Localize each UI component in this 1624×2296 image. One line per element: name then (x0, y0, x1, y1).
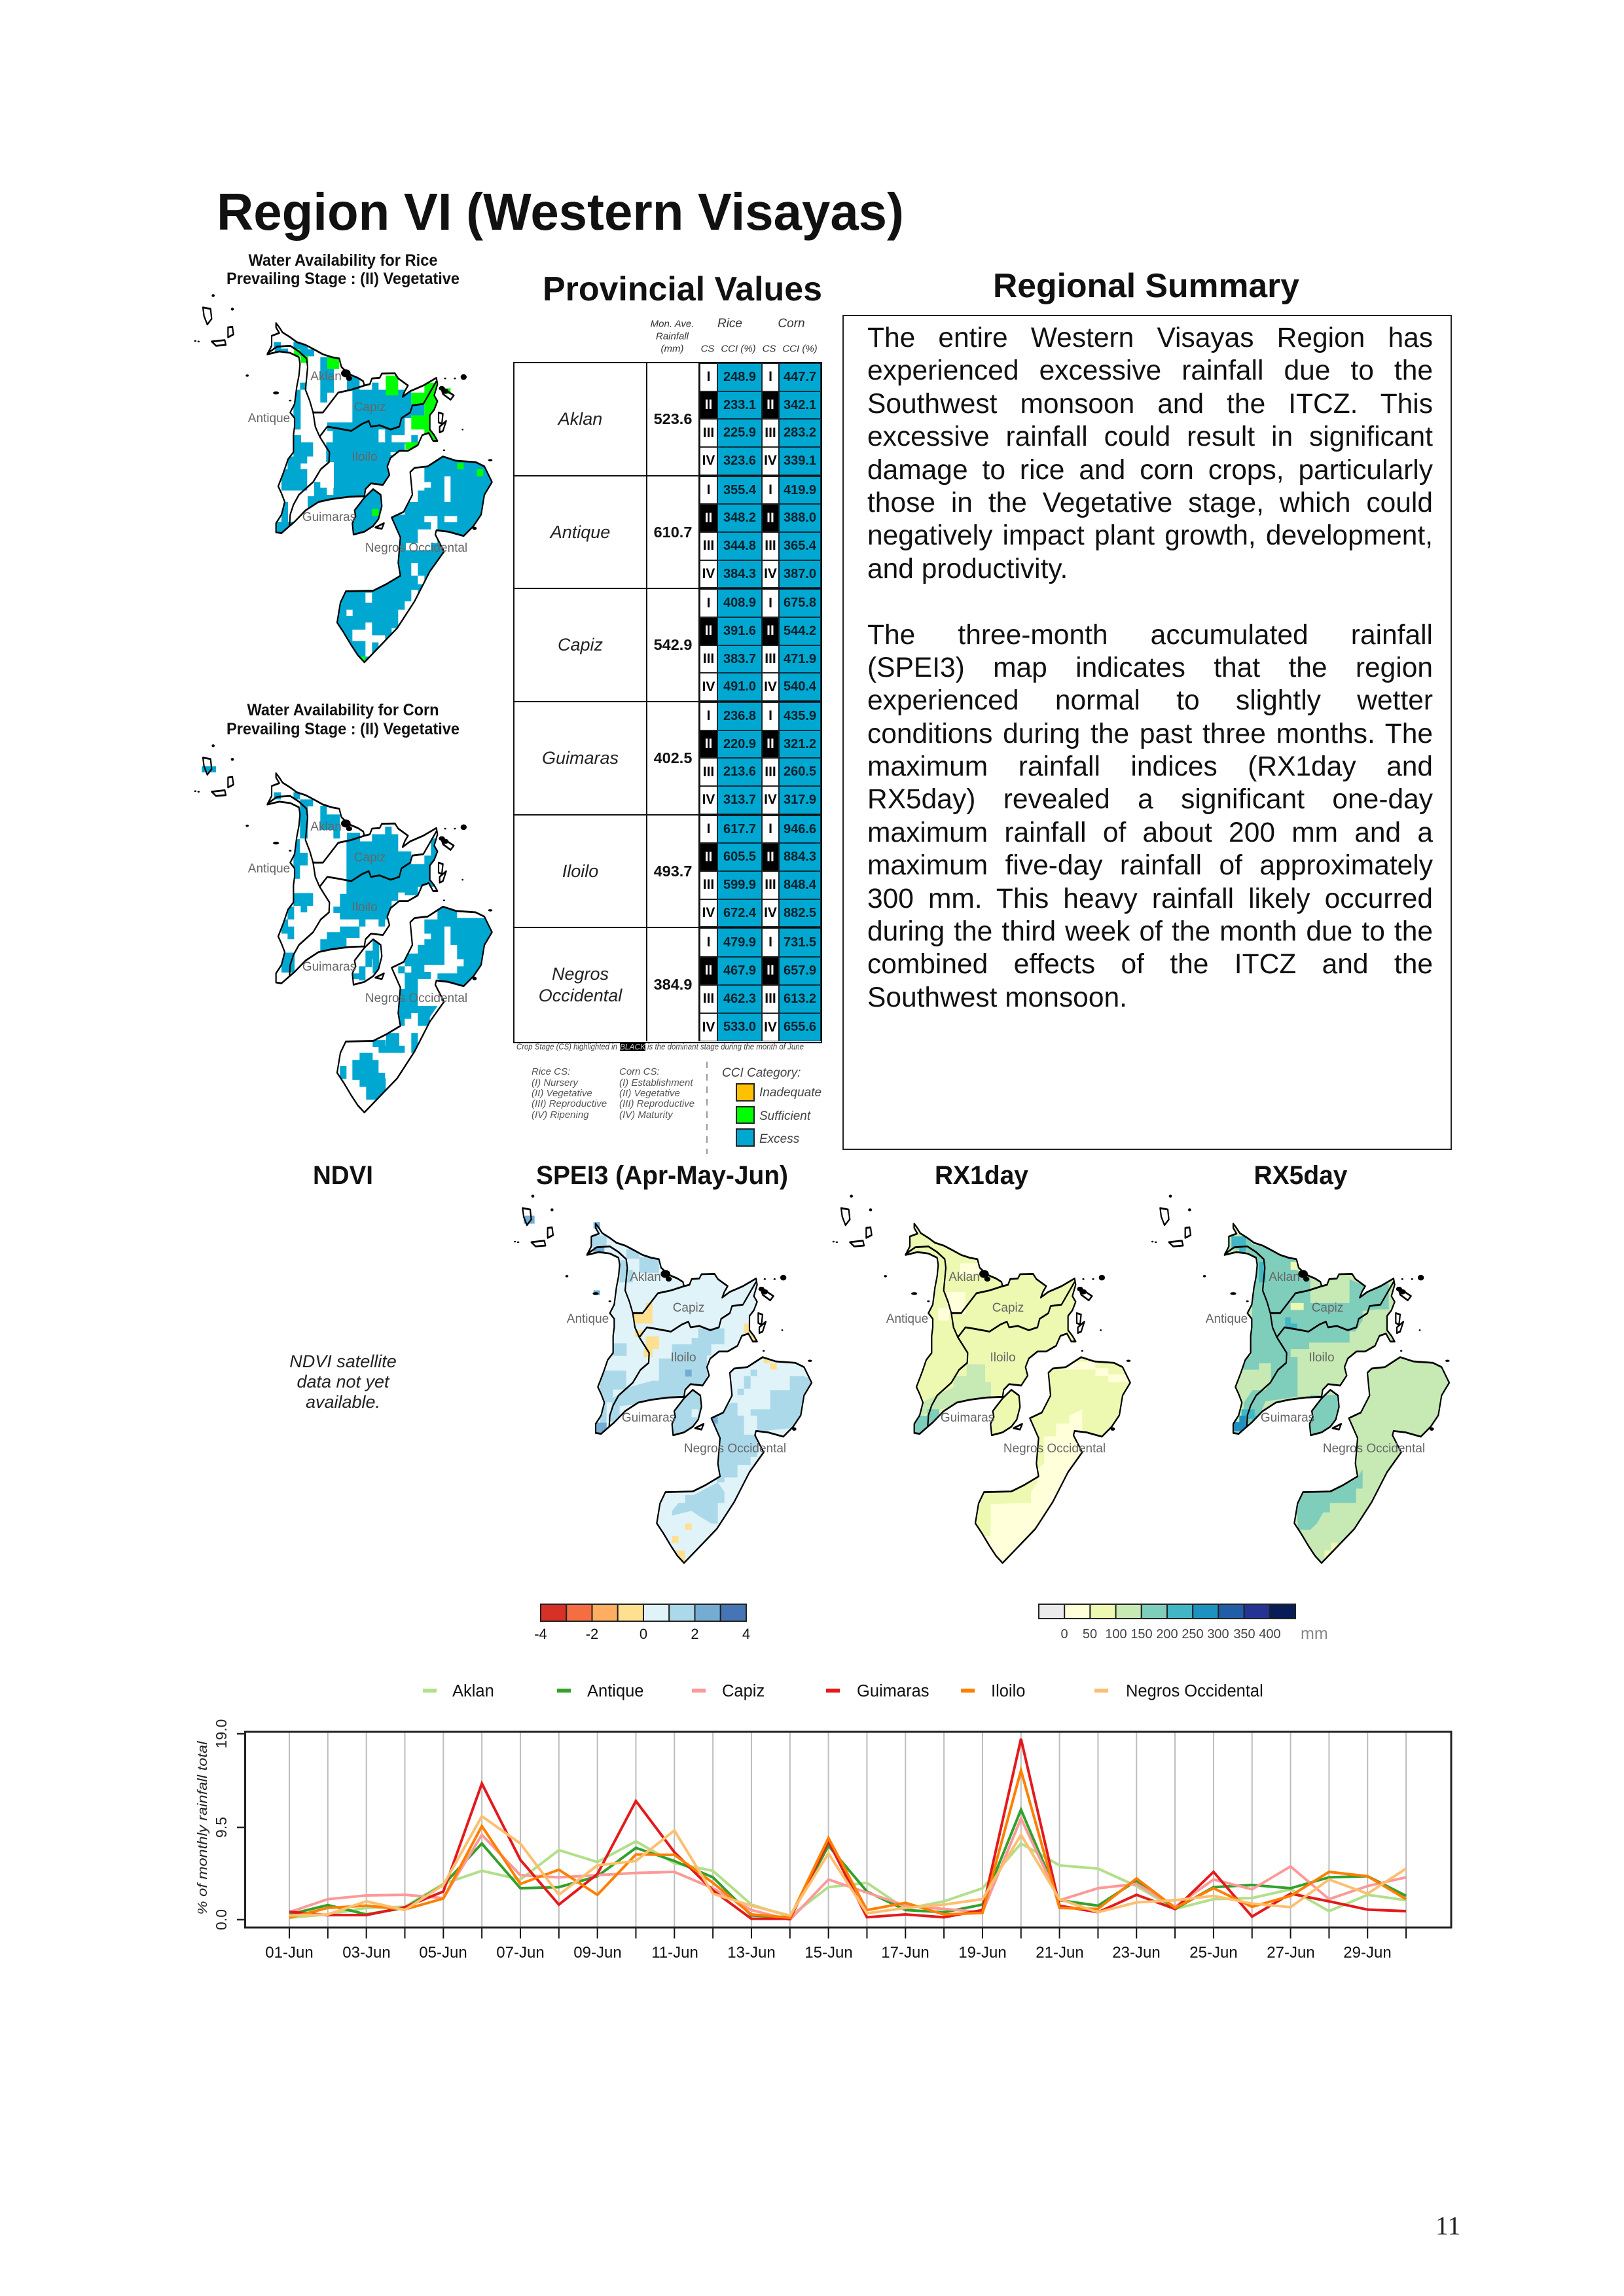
table row: Guimaras: 317.9 (784, 793, 816, 807)
table column headers (651, 317, 818, 355)
table row: Guimaras: II (767, 736, 774, 751)
table row: Iloilo: 848.4 (784, 878, 816, 892)
x axis labels: 19-Jun (958, 1944, 1007, 1962)
panel: corn water availability map (194, 701, 493, 1113)
series: Iloilo (289, 1770, 1406, 1918)
table row: Negros Occidental: 613.2 (784, 992, 816, 1006)
legend: rainfall colour bar: 0 (1060, 1627, 1068, 1641)
heading: NDVI: NDVI (313, 1161, 373, 1190)
table row: Guimaras: Guimaras (542, 748, 619, 768)
table row: Capiz: IV (764, 679, 777, 694)
table row: Capiz: 542.9 (654, 636, 692, 653)
map labels: rice: Antique (248, 412, 290, 425)
table row: Guimaras: 260.5 (784, 764, 816, 779)
table column headers: (mm) (661, 343, 683, 355)
panel: RX1day map (833, 1161, 1130, 1565)
table row: Antique: 365.4 (784, 539, 816, 553)
map labels: RX5day: Guimaras (1261, 1411, 1314, 1425)
panel: RX5day map (1151, 1161, 1450, 1563)
table row: Negros Occidental: 657.9 (784, 963, 816, 978)
table row: Guimaras: IV (764, 792, 777, 807)
NDVI unavailable note (289, 1352, 397, 1412)
table row: Antique: 355.4 (723, 483, 756, 497)
legend: corn crop stages: (II) Vegetative (619, 1088, 680, 1099)
chart legend: Antique (587, 1682, 644, 1700)
NDVI unavailable note: NDVI satellite (289, 1352, 397, 1371)
map labels: SPEI3 (567, 1270, 786, 1456)
map labels: RX5day: Capiz (1312, 1301, 1343, 1315)
y axis labels: 0.0 (213, 1909, 230, 1930)
map labels: RX1day: Negros Occidental (1003, 1442, 1106, 1456)
heading: rice map title (226, 251, 460, 288)
legend: SPEI colour bar: -4 (534, 1626, 547, 1642)
legend: rice crop stages (532, 1066, 607, 1121)
table row: Negros Occidental: IV (764, 1020, 777, 1035)
table row: Aklan: 225.9 (723, 425, 756, 440)
table row: Antique: 344.8 (723, 539, 756, 553)
legend: corn crop stages: (I) Establishment (619, 1077, 693, 1088)
table row: Antique: IV (702, 566, 715, 581)
map labels: corn: Negros Occidental (365, 992, 467, 1005)
map labels: RX1day: Aklan (948, 1270, 980, 1284)
table row: Iloilo: 884.3 (784, 850, 816, 864)
x axis labels: 21-Jun (1036, 1944, 1084, 1962)
x axis labels: 07-Jun (496, 1944, 545, 1962)
table row: Antique: III (703, 538, 714, 553)
table row: Negros Occidental: 467.9 (723, 963, 756, 978)
table column headers: CS (701, 343, 714, 355)
panel: rice water availability map (194, 251, 493, 665)
table row: Iloilo: II (705, 850, 712, 865)
map labels: corn (248, 820, 467, 1005)
table row: Negros Occidental: 533.0 (723, 1020, 756, 1034)
map labels: RX1day (886, 1270, 1106, 1456)
chart legend: Negros Occidental (1126, 1682, 1263, 1700)
map labels: rice (248, 370, 467, 555)
NDVI unavailable note: data not yet (297, 1372, 390, 1391)
map labels: SPEI3: Iloilo (670, 1351, 696, 1365)
legend: rice crop stages: (I) Nursery (532, 1077, 579, 1088)
table row: Iloilo: IV (702, 905, 715, 920)
table row: Negros Occidental: Occidental (539, 986, 622, 1005)
text block: regional summary: experienced excessive rainfall due to the (867, 355, 1433, 386)
panel: SPEI3 map (514, 1161, 816, 1642)
table row: Capiz: IV (702, 679, 715, 694)
text block: regional summary: experienced normal to slightly wetter (867, 685, 1433, 716)
legend: CCI category (722, 1066, 821, 1146)
table row: Aklan: 523.6 (654, 410, 692, 427)
map labels: corn: Aklan (310, 820, 342, 834)
table row: Capiz: II (705, 623, 712, 638)
table row: Iloilo: 599.9 (723, 878, 756, 892)
legend: rainfall colour bar: 100 (1105, 1627, 1127, 1641)
text block: regional summary: those in the Vegetative stage, which could (867, 488, 1433, 518)
table row: Iloilo: 617.7 (723, 822, 756, 836)
text block: regional summary (867, 323, 1433, 1013)
x axis labels: 15-Jun (804, 1944, 853, 1962)
table row: Capiz: 491.0 (723, 679, 756, 694)
legend: corn crop stages: (IV) Maturity (619, 1109, 674, 1121)
legend: rice crop stages: (II) Vegetative (532, 1088, 592, 1099)
table row: Capiz: I (707, 596, 710, 611)
table row: Capiz: III (765, 651, 776, 666)
x axis labels: 01-Jun (265, 1944, 314, 1962)
text block: regional summary: The entire Western Visayas Region has (867, 323, 1433, 353)
text block: regional summary: 300 mm. This heavy rainfall likely occurred (867, 884, 1433, 914)
legend: SPEI colour bar: -2 (586, 1626, 598, 1642)
table row: Guimaras: 435.9 (784, 709, 816, 723)
table row: Aklan: 283.2 (784, 425, 816, 440)
map labels: RX5day: Aklan (1269, 1270, 1300, 1284)
x axis labels: 03-Jun (342, 1944, 391, 1962)
table row: Capiz: 471.9 (784, 652, 816, 666)
legend: rainfall colour bar: 250 (1182, 1627, 1204, 1641)
legend: rainfall colour bar: 50 (1083, 1627, 1097, 1641)
map labels: RX1day: Antique (886, 1312, 928, 1326)
x axis labels: 13-Jun (727, 1944, 776, 1962)
map: SPEI3 (514, 1194, 816, 1563)
table row: Negros Occidental: 384.9 (654, 976, 692, 993)
legend: SPEI colour bar: 2 (691, 1626, 699, 1642)
legend: rainfall colour bar: 150 (1130, 1627, 1153, 1641)
table column headers: Corn (778, 317, 805, 331)
chart frame (245, 1732, 1451, 1928)
table row: Negros Occidental: IV (702, 1020, 715, 1035)
table row: Iloilo: 946.6 (784, 822, 816, 836)
table column headers: Rice (717, 317, 742, 331)
table row: Antique: 384.3 (723, 567, 756, 581)
chart legend: Capiz (722, 1682, 765, 1700)
map labels: SPEI3: Aklan (630, 1270, 661, 1284)
table row: Iloilo (514, 816, 821, 928)
series: Capiz (289, 1818, 1406, 1920)
table row: Capiz: 540.4 (784, 679, 816, 694)
table row: Aklan: 447.7 (784, 370, 816, 384)
legend: CCI category: Inadequate (759, 1086, 821, 1100)
map labels: corn: Antique (248, 862, 290, 876)
text block: regional summary: during the third week of the month due to the (867, 916, 1433, 947)
legend: rainfall colour bar (1039, 1604, 1328, 1643)
table row: Guimaras (514, 702, 821, 816)
chart legend: Guimaras (857, 1682, 929, 1700)
map labels: rice: Capiz (354, 401, 386, 414)
table row: Capiz: 408.9 (723, 596, 756, 610)
line chart: daily rainfall share (196, 1719, 1451, 1962)
table row: Antique: II (705, 511, 712, 526)
heading: rice map title: Water Availability for Rice (249, 251, 438, 270)
map labels: rice: Aklan (310, 370, 342, 384)
table row: Guimaras: IV (702, 792, 715, 807)
table row: Negros Occidental: 731.5 (784, 935, 816, 950)
table row: Antique: 388.0 (784, 511, 816, 525)
heading: corn map title: Water Availability for Corn (247, 701, 439, 719)
map labels: RX5day (1206, 1270, 1425, 1456)
table row: Antique: 348.2 (723, 511, 756, 525)
table row: Antique: 610.7 (654, 524, 692, 541)
map labels: SPEI3: Negros Occidental (684, 1442, 786, 1456)
table row: Capiz: 675.8 (784, 596, 816, 610)
table row: Aklan: I (707, 369, 710, 384)
map labels: SPEI3: Antique (567, 1312, 609, 1326)
map labels: RX1day: Capiz (992, 1301, 1024, 1315)
table row: Capiz: III (703, 651, 714, 666)
table row: Negros Occidental (539, 928, 821, 1041)
table row: Iloilo: I (707, 821, 710, 836)
legend: SPEI colour bar: 4 (742, 1626, 750, 1642)
table row: Antique: I (768, 482, 772, 497)
table row: Negros Occidental: 479.9 (723, 935, 756, 950)
x axis labels: 09-Jun (573, 1944, 622, 1962)
legend: rice crop stages: (IV) Ripening (532, 1109, 589, 1121)
table row: Antique: 419.9 (784, 483, 816, 497)
legend: rainfall colour bar: 300 (1207, 1627, 1229, 1641)
legend: SPEI colour bar: 0 (640, 1626, 647, 1642)
table row: Iloilo: Iloilo (562, 861, 598, 881)
x axis labels: 11-Jun (651, 1944, 698, 1962)
table row: Aklan: Aklan (558, 409, 602, 429)
map: RX1day (833, 1194, 1130, 1565)
map labels: SPEI3: Guimaras (622, 1411, 676, 1425)
map labels: RX5day: Negros Occidental (1323, 1442, 1425, 1456)
text block: regional summary: damage to rice and corn crops, particularly (867, 455, 1433, 486)
table row: Capiz: II (767, 623, 774, 638)
text block: regional summary: maximum rainfall indices (RX1day and (867, 751, 1433, 782)
x axis labels: 17-Jun (881, 1944, 929, 1962)
table row: Negros Occidental: III (703, 991, 714, 1006)
heading: SPEI3: SPEI3 (Apr-May-Jun) (536, 1161, 788, 1190)
x axis labels: 23-Jun (1112, 1944, 1161, 1962)
table row: Antique: IV (764, 566, 777, 581)
table row: Aklan: III (765, 425, 776, 440)
legend: CCI category: Sufficient (759, 1109, 811, 1123)
table row: Iloilo: 605.5 (723, 850, 756, 864)
table row: Iloilo: IV (764, 905, 777, 920)
table row: Aklan: 323.6 (723, 454, 756, 468)
table row: Iloilo: 493.7 (654, 863, 692, 880)
table row: Aklan: 233.1 (723, 398, 756, 412)
table: provincial values (513, 362, 822, 1043)
table row: Iloilo: 882.5 (784, 906, 816, 920)
table column headers: Mon. Ave. (651, 318, 694, 330)
text block: regional summary: combined effects of the ITCZ and the (867, 949, 1433, 980)
text block: regional summary: RX5day) revealed a significant one-day (867, 784, 1433, 815)
table row: Negros Occidental: Negros (552, 964, 609, 984)
table row: Negros Occidental: I (707, 935, 710, 950)
legend: rice crop stages: Rice CS: (532, 1066, 570, 1077)
table row: Aklan: II (767, 397, 774, 412)
panel: regional summary box (842, 315, 1452, 1150)
table row: Capiz: Capiz (558, 635, 603, 655)
map: RX5day (1151, 1194, 1450, 1563)
map labels: corn: Iloilo (352, 901, 378, 914)
title: Region VI (Western Visayas) (217, 183, 904, 241)
text block: regional summary: The three-month accumulated rainfall (867, 620, 1433, 651)
table row: Guimaras: 236.8 (723, 709, 756, 723)
heading: provincial values: Provincial Values (543, 270, 822, 308)
table column headers: Rainfall (656, 331, 689, 342)
text block: regional summary: Southwest monsoon and the ITCZ. This (867, 389, 1433, 420)
text block: regional summary: and productivity. (867, 554, 1068, 584)
table row: Capiz: 391.6 (723, 624, 756, 638)
map labels: RX1day: Guimaras (941, 1411, 994, 1425)
legend: CCI category: CCI Category: (722, 1066, 801, 1080)
table row: Guimaras: 313.7 (723, 793, 756, 807)
legend: SPEI colour bar (534, 1604, 750, 1642)
table row: Iloilo: III (703, 877, 714, 892)
legend: rainfall colour bar: 200 (1156, 1627, 1178, 1641)
map: corn water availability (194, 744, 493, 1113)
series: Guimaras (289, 1739, 1406, 1919)
table row: Aklan: II (705, 397, 712, 412)
legend: CCI category: Excess (759, 1132, 800, 1146)
text block: regional summary: maximum rainfall of about 200 mm and a (867, 817, 1433, 848)
table column headers: CCI (%) (782, 343, 818, 355)
map labels: RX1day: Iloilo (990, 1351, 1016, 1365)
table row: Guimaras: I (707, 708, 710, 723)
table row: Guimaras: 220.9 (723, 737, 756, 751)
table row: Negros Occidental: 655.6 (784, 1020, 816, 1034)
table row: Antique: Antique (550, 522, 610, 542)
y axis labels (213, 1719, 230, 1930)
table row: Iloilo: II (767, 850, 774, 865)
table row: Capiz: I (768, 596, 772, 611)
table row: Iloilo: III (765, 877, 776, 892)
table row: Capiz (514, 589, 821, 702)
table row: Guimaras: 402.5 (654, 749, 692, 766)
table footnote: Crop Stage (CS) highlighted in (516, 1042, 617, 1051)
table row: Guimaras: II (705, 736, 712, 751)
chart legend: Aklan (452, 1682, 494, 1700)
table row: Aklan: I (768, 369, 772, 384)
heading: rice map title: Prevailing Stage : (II) Vegetative (226, 270, 460, 288)
table row: Aklan (514, 363, 821, 476)
table row: Aklan: 248.9 (723, 370, 756, 384)
table row: Guimaras: III (703, 764, 714, 780)
map labels: rice: Iloilo (352, 450, 378, 464)
heading: corn map title: Prevailing Stage : (II) Vegetative (226, 720, 460, 738)
text block: regional summary: negatively impact plant growth, development, (867, 520, 1433, 551)
y axis title: % of monthly rainfall total (196, 1741, 210, 1915)
table footnote (516, 1042, 804, 1051)
table row: Iloilo: I (768, 821, 772, 836)
heading: corn map title (226, 701, 460, 738)
x axis labels: 27-Jun (1267, 1944, 1315, 1962)
legend: rice crop stages: (III) Reproductive (532, 1098, 607, 1109)
map labels: corn: Guimaras (302, 960, 356, 974)
table row: Guimaras: I (768, 708, 772, 723)
heading: RX1day: RX1day (935, 1161, 1029, 1190)
table row: Antique (514, 476, 821, 589)
map labels: RX5day: Iloilo (1308, 1351, 1335, 1365)
table row: Negros Occidental: II (767, 963, 774, 978)
table row: Aklan: IV (702, 453, 715, 468)
table row: Antique: 387.0 (784, 567, 816, 581)
table row: Guimaras: 321.2 (784, 737, 816, 751)
text block: regional summary: (SPEI3) map indicates that the region (867, 653, 1433, 683)
table row: Aklan: 342.1 (784, 398, 816, 412)
x axis labels (265, 1944, 1392, 1962)
series: Aklan (289, 1841, 1406, 1918)
page number: 11 (1435, 2211, 1461, 2240)
table row: Negros Occidental: 462.3 (723, 992, 756, 1006)
legend unit: mm (1301, 1624, 1328, 1643)
table row: Antique: I (707, 482, 710, 497)
map: rice water availability (194, 294, 493, 665)
legend: corn crop stages (619, 1066, 695, 1121)
table row: Aklan: IV (764, 453, 777, 468)
series: Negros Occidental (289, 1816, 1406, 1916)
y axis labels: 9.5 (213, 1817, 230, 1838)
heading: regional summary: Regional Summary (993, 267, 1299, 305)
map labels: rice: Negros Occidental (365, 541, 467, 555)
legend: corn crop stages: (III) Reproductive (619, 1098, 695, 1109)
x axis labels: 29-Jun (1343, 1944, 1392, 1962)
table row: Capiz: 544.2 (784, 624, 816, 638)
x axis labels: 25-Jun (1189, 1944, 1238, 1962)
map labels: rice: Guimaras (302, 511, 356, 524)
map labels: RX5day: Antique (1206, 1312, 1248, 1326)
legend: rainfall colour bar: 400 (1259, 1627, 1281, 1641)
table row: Antique: III (765, 538, 776, 553)
legend: rainfall colour bar: 350 (1233, 1627, 1255, 1641)
chart legend (423, 1682, 1263, 1700)
table column headers: CS (763, 343, 776, 355)
table row: Negros Occidental: III (765, 991, 776, 1006)
table row: Negros Occidental: II (705, 963, 712, 978)
legend: corn crop stages: Corn CS: (619, 1066, 660, 1077)
chart legend: Iloilo (991, 1682, 1025, 1700)
table row: Aklan: 339.1 (784, 454, 816, 468)
table row: Guimaras: 213.6 (723, 764, 756, 779)
table column headers: CCI (%) (721, 343, 756, 355)
map labels: SPEI3: Capiz (673, 1301, 704, 1315)
series: Antique (289, 1810, 1406, 1917)
table footnote: BLACK (620, 1042, 646, 1051)
map labels: corn: Capiz (354, 851, 386, 865)
table row: Aklan: III (703, 425, 714, 440)
x axis labels: 05-Jun (419, 1944, 467, 1962)
table row: Capiz: 383.7 (723, 652, 756, 666)
table row: Guimaras: III (765, 764, 776, 780)
y axis labels: 19.0 (213, 1719, 230, 1748)
table footnote: is the dominant stage during the month of June (647, 1042, 804, 1051)
text block: regional summary: excessive rainfall could result in significant (867, 422, 1433, 452)
table row: Antique: II (767, 511, 774, 526)
heading: RX5day: RX5day (1254, 1161, 1348, 1190)
table row: Negros Occidental: I (768, 935, 772, 950)
NDVI unavailable note: available. (306, 1392, 380, 1412)
text block: regional summary: Southwest monsoon. (867, 982, 1127, 1013)
text block: regional summary: maximum five-day rainfall of approximately (867, 850, 1433, 881)
table row: Iloilo: 672.4 (723, 906, 756, 920)
text block: regional summary: conditions during the past three months. The (867, 719, 1433, 749)
